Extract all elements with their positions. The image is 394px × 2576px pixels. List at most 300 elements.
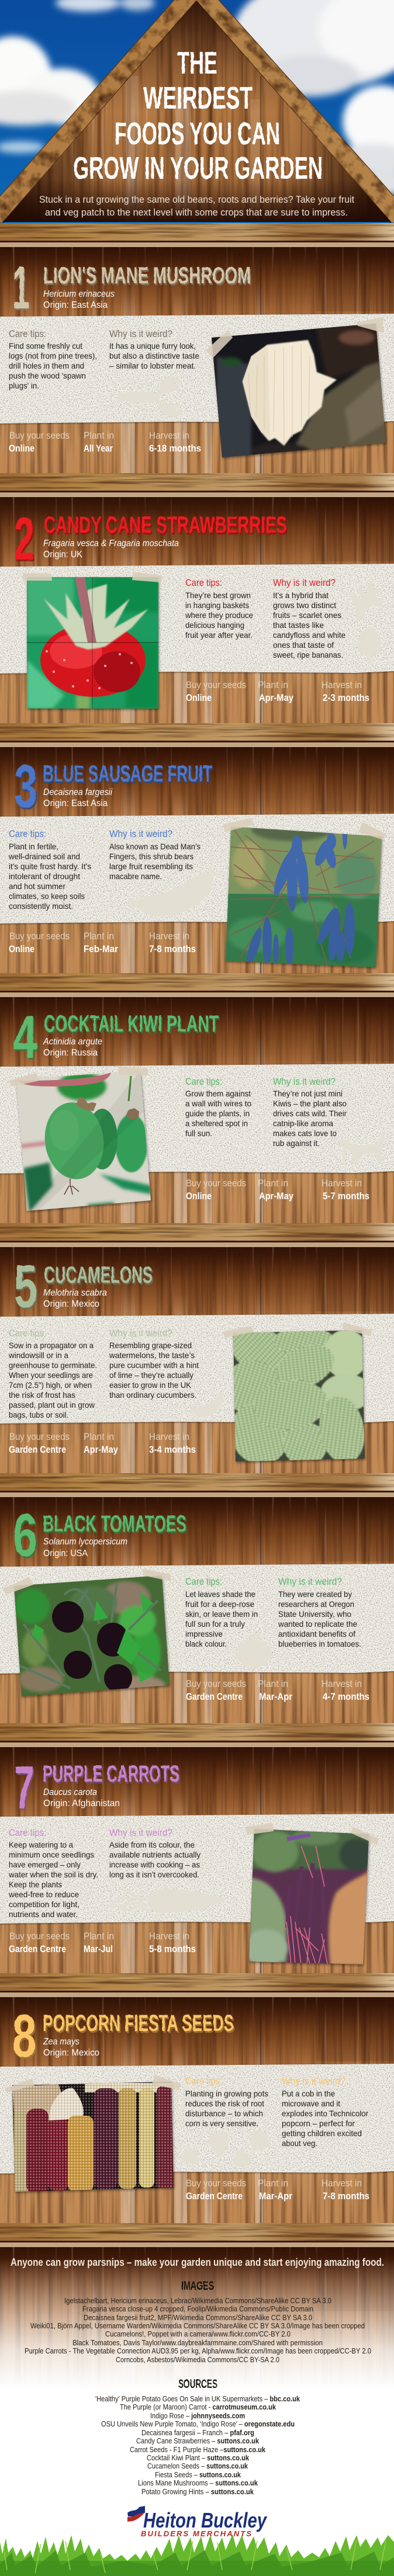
care tips: Care tips: [185,577,222,588]
logo: Heiton Buckley Builders Merchants [127,2506,268,2538]
sky with clouds [0,0,394,225]
why weird [278,1576,361,1648]
source list: Decaisnea fargesii – Franch – pfaf.org [141,2429,254,2437]
seeds planting harvest facts [186,1679,369,1702]
why weird: increase with cooking – as [109,1860,200,1869]
title: THE [177,46,217,81]
seeds planting harvest facts: All Year [84,443,113,454]
seeds planting harvest facts: Online [9,944,34,954]
seeds planting harvest facts: Mar-Jul [84,1944,113,1954]
seeds planting harvest facts: Plant in [258,1178,288,1189]
species and origin: Origin: East Asia [43,799,108,808]
care tips: a sheltered spot in [185,1119,248,1128]
why weird: wanted to replicate the [278,1619,357,1629]
care tips: competition for light, [9,1900,80,1909]
panel: footer [0,2223,394,2576]
why weird [109,828,201,881]
seeds planting harvest facts: Buy your seeds [9,431,70,441]
species and origin: Origin: Mexico [43,1299,99,1309]
care tips: reduces the risk of root [185,2099,264,2108]
care tips: Care tips: [9,828,46,839]
sources heading: SOURCES [178,2377,217,2391]
care tips: 7cm (2.5") high, or when [9,1380,92,1390]
seeds planting harvest facts: Buy your seeds [186,1178,246,1189]
care tips [8,1328,97,1419]
care tips: skin, or leave them in [185,1609,258,1619]
heading number and title: 3 [14,753,37,821]
heading number and title: 5 [14,1253,37,1321]
seeds planting harvest facts: Harvest in [322,680,362,690]
why weird: easier to grow in the UK [109,1380,192,1390]
why weird: makes cats love to [273,1129,337,1138]
photo: purple carrots [244,1825,374,1969]
why weird: Also known as Dead Man’s [109,842,201,851]
why weird [282,2075,368,2148]
panel: 2 candy cane strawberries [0,473,394,723]
roof beam [0,1723,394,1749]
heading number and title [14,1754,179,1822]
panel: 5 cucamelons [0,1223,394,1476]
why weird: than ordinary cucumbers. [109,1390,196,1400]
why weird: catnip-like aroma [273,1119,333,1128]
source list: Lions Mane Mushrooms – suttons.co.uk [138,2479,258,2487]
heading number and title: 8 [12,2002,36,2070]
source list: Candy Cane Strawberries – suttons.co.uk [136,2437,259,2445]
why weird: pure cucumber with a hint [109,1360,199,1370]
source list: Indigo Rose – johnnyseeds.com [150,2412,245,2420]
title [73,46,323,186]
why weird: popcorn – perfect for [282,2119,355,2128]
why weird: Why is it weird? [109,328,172,339]
image credits: Cucamelons!, Poppet with a camera/www.flickr.com/CC-BY 2.0 [105,2330,291,2338]
tape [223,818,386,840]
seeds planting harvest facts: 2-3 months [323,693,369,703]
care tips: delicious hanging [185,620,244,630]
roof beam [0,2223,394,2249]
seeds planting harvest facts: Buy your seeds [186,2178,246,2189]
wood planks [0,747,394,973]
care tips: Keep watering to a [9,1840,73,1849]
care tips: it's quite frost hardy. It's [9,862,91,871]
care tips: Sow in a propagator on a [9,1341,94,1350]
species and origin: Origin: East Asia [43,300,108,310]
heading number and title [14,753,212,821]
icon: banana watermark [347,578,383,620]
tape [223,1323,372,1338]
species and origin: Origin: Mexico [43,2048,99,2058]
seeds planting harvest facts: Online [9,443,34,454]
icon: sausage watermark [130,867,219,916]
paper strip [0,564,394,673]
heading number and title: BLACK TOMATOES [43,1511,186,1537]
paper strip [0,314,394,423]
species and origin [43,539,179,560]
seeds planting harvest facts: Garden Centre [9,1445,66,1455]
species and origin [43,289,115,310]
why weird: Fingers, this shrub bears [109,852,193,861]
seeds planting harvest facts: Harvest in [322,2178,362,2189]
why weird: It’s a hybrid that [273,591,329,600]
care tips: the risk of frost has [9,1390,75,1400]
icon: popcorn watermark [182,2130,269,2167]
source list: Carrot Seeds - F1 Purple Haze –suttons.co.uk [130,2446,265,2454]
care tips: nutrients and water. [9,1910,78,1919]
why weird: blueberries in tomatoes. [278,1639,361,1648]
care tips: a wall with wires to [185,1099,251,1108]
heading number and title: CANDY CANE STRAWBERRIES [44,512,287,538]
seeds planting harvest facts [9,931,196,954]
seeds planting harvest facts: Harvest in [322,1679,362,1689]
source list: OSU Unveils New Purple Tomato, ‘Indigo Rose’ – oregonstate.edu [101,2420,295,2428]
care tips: consistently moist. [9,901,73,911]
panel: 7 purple carrots [0,1723,394,1973]
photo: corn cobs [9,2079,175,2193]
seeds planting harvest facts: Apr-May [259,1191,294,1202]
seeds planting harvest facts: 5-7 months [323,1191,369,1202]
species and origin [43,1787,120,1808]
care tips [185,2075,268,2128]
roof wood gable [0,0,394,225]
tape [5,2075,181,2092]
care tips: weed-free to reduce [8,1890,79,1899]
why weird: getting children excited [282,2129,362,2138]
care tips: greenhouse to germinate. [9,1360,97,1370]
why weird: microwave and it [282,2099,340,2108]
image credits: Black Tomatoes, Davis Taylor/www.daybreakfarmmaine.com/Shared with permission [72,2339,323,2347]
heading number and title [13,1004,219,1071]
photo: cucamelons [232,1329,367,1464]
care tips: passed, plant out in grow [9,1400,95,1409]
image credits: Igelstachelbart, Hericium erinaceus, Lebrac/Wikimedia Commons/ShareAlike CC BY SA 3.0 [64,2297,331,2305]
seeds planting harvest facts: Online [186,1191,212,1202]
logo: Heiton Buckley Builders Merchants: BUILDERS MERCHANTS [141,2529,251,2538]
care tips: and hot summer [9,881,65,891]
why weird: of lime – they’re actually [109,1370,193,1380]
care tips: bags, tubs or soil. [9,1410,68,1419]
roof beam [0,973,394,999]
roof beam [0,1223,394,1249]
panel: 1 lion's mane mushroom [0,223,394,473]
seeds planting harvest facts: 4-7 months [323,1692,369,1702]
heading number and title: BLUE SAUSAGE FRUIT [43,761,212,787]
image credits [25,2297,371,2364]
tape [3,1569,171,1595]
seeds planting harvest facts: Buy your seeds [9,1931,70,1942]
species and origin [43,1288,107,1309]
seeds planting harvest facts: Plant in [84,431,114,441]
care tips [9,328,97,390]
source list: Potato Growing Hints – suttons.co.uk [141,2488,254,2496]
care tips: minimum once seedlings [9,1850,94,1859]
species and origin: Fragaria vesca & Fragaria moschata [43,539,179,548]
roof beam [0,1473,394,1499]
why weird: macabre name. [109,872,162,881]
wood planks [0,1997,394,2223]
seeds planting harvest facts: Buy your seeds [186,680,246,690]
paper strip [0,1064,394,1174]
species and origin [43,1037,102,1058]
roof frame [0,0,394,223]
heading number and title: 6 [13,1502,37,1570]
care tips: Care tips: [9,328,46,339]
heading number and title: 1 [12,254,30,322]
seeds planting harvest facts: Buy your seeds [9,1432,70,1442]
photo: lion's mane mushroom [208,318,389,461]
intro text: and veg patch to the next level with some crops that are sure to impress. [45,207,348,218]
tape [245,1823,379,1845]
source list: Cucamelon Seeds – suttons.co.uk [147,2462,248,2470]
source list: Cocktail Kiwi Plant – suttons.co.uk [147,2454,249,2462]
why weird: Why is it weird? [109,828,172,839]
why weird [109,1827,201,1879]
why weird: Why is it weird? [273,577,336,588]
seeds planting harvest facts: Mar-Apr [259,1692,293,1702]
care tips: Care tips: [185,1076,222,1087]
icon: candyfloss watermark [357,626,381,664]
seeds planting harvest facts: Feb-Mar [84,944,119,954]
care tips [8,1827,98,1919]
care tips: Find some freshly cut [9,341,82,350]
tape [206,317,383,358]
why weird: candyfloss and white [273,630,345,640]
roof beam [0,473,394,499]
title: FOODS YOU CAN [115,116,280,151]
why weird: sweet, ripe bananas. [273,650,343,659]
care tips [185,1076,251,1138]
why weird: ones that taste of [273,640,334,650]
tape [23,572,162,582]
why weird: available nutrients actually [109,1850,201,1859]
seeds planting harvest facts: Online [186,693,212,703]
paper strip [0,1814,394,1924]
heading number and title: 2 [14,505,34,573]
photo: kiwi fruit [12,1066,155,1215]
care tips: fruit year after year. [185,630,253,640]
why weird: – similar to lobster meat. [109,361,196,370]
why weird: State University, who [278,1609,351,1619]
heading number and title: CUCAMELONS [44,1262,153,1288]
panel: 6 black tomatoes [0,1473,394,1723]
why weird: They’re not just mini [273,1089,343,1098]
image credits: Corncobs, Asbestos/Wikimedia Commons/CC BY-SA 2.0 [116,2356,279,2364]
seeds planting harvest facts: Harvest in [149,931,189,942]
image credits: Fragaria vesca close-up 4 cropped, Foolip/Wikimedia Commons/Public Domain [82,2305,313,2313]
care tips: Care tips: [185,2075,222,2087]
care tips: have emerged – only [9,1860,81,1869]
care tips: Plant in fertile, [9,842,58,851]
heading number and title [12,2002,234,2070]
images heading: IMAGES [181,2279,214,2293]
source list: 'Healthy' Purple Potato Goes On Sale in UK Supermarkets – bbc.co.uk [95,2395,300,2403]
care tips: plugs' in. [9,381,39,390]
seeds planting harvest facts: Garden Centre [9,1944,66,1954]
heading number and title: POPCORN FIESTA SEEDS [43,2011,234,2036]
care tips [185,577,253,640]
care tips: Let leaves shade the [185,1589,255,1599]
species and origin: Zea mays [43,2037,80,2047]
care tips: Grow them against [185,1089,251,1098]
paper strip [0,1314,394,1424]
why weird [109,1328,199,1400]
seeds planting harvest facts: Plant in [84,1432,114,1442]
care tips: water when the soil is dry. [8,1870,98,1879]
species and origin [43,787,112,808]
seeds planting harvest facts: Mar-Apr [259,2191,293,2202]
care tips: well-drained soil and [8,852,80,861]
seeds planting harvest facts: 5-8 months [149,1944,196,1954]
care tips: full sun for a truly [185,1619,245,1629]
care tips: logs (not from pine trees), [9,351,97,360]
icon: grass [0,2534,394,2576]
wood planks [0,1747,394,1973]
species and origin: Solanum lycopersicum [43,1537,127,1547]
species and origin [43,1537,127,1558]
why weird: rub against it. [273,1138,320,1148]
logo: Heiton Buckley Builders Merchants: Heiton Buckley [143,2508,268,2532]
source list [95,2395,300,2496]
intro text: Stuck in a rut growing the same old beans, roots and berries? Take your fruit [39,194,354,205]
photo: black tomatoes [12,1571,172,1700]
care tips [185,1576,258,1648]
why weird [109,328,199,370]
species and origin: Origin: USA [43,1549,88,1558]
care tips: When your seedlings are [9,1370,93,1380]
why weird: grows two distinct [273,600,336,610]
icon: carrot watermark [111,1888,227,1913]
panel: header sky and roof [0,0,394,225]
wood planks [0,247,394,473]
heading number and title: LION'S MANE MUSHROOM [43,263,251,289]
why weird: antioxidant benefits of [278,1629,355,1638]
seeds planting harvest facts: Garden Centre [186,1692,243,1702]
why weird: long as it isn’t overcooked. [109,1870,199,1879]
why weird: Why is it weird? [109,1328,172,1339]
care tips: Care tips: [9,1328,46,1339]
wood planks [0,1497,394,1723]
seeds planting harvest facts [186,680,369,703]
seeds planting harvest facts: Buy your seeds [186,1679,246,1689]
seeds planting harvest facts [186,2178,369,2202]
seeds planting harvest facts [186,1178,369,1202]
seeds planting harvest facts: Harvest in [149,1432,189,1442]
intro text [39,194,354,218]
photo: blue sausage fruit [222,818,386,970]
why weird: Kiwis – the plant also [273,1099,347,1108]
photo: strawberry [27,577,158,710]
seeds planting harvest facts: Plant in [84,931,114,942]
title: WEIRDEST [143,81,253,116]
care tips: push the wood 'spawn [9,371,86,380]
species and origin: Decaisnea fargesii [43,787,112,797]
wood planks fading to white [0,2247,394,2576]
heading number and title: 7 [14,1754,34,1822]
seeds planting harvest facts: Plant in [258,1679,288,1689]
why weird: Why is it weird? [109,1827,172,1838]
why weird: that tastes like [273,620,324,630]
care tips: disturbance – to which [185,2109,263,2118]
wood planks [0,497,394,723]
why weird: researchers at Oregon [278,1599,354,1609]
seeds planting harvest facts: 7-8 months [149,944,196,954]
care tips: where they produce [185,610,253,620]
why weird: large fruit resembling its [109,862,193,871]
care tips: black colour. [185,1639,227,1648]
wood planks [0,1247,394,1473]
care tips: Care tips: [9,1827,46,1838]
seeds planting harvest facts: Garden Centre [186,2191,243,2202]
heading number and title: PURPLE CARROTS [43,1761,179,1787]
why weird: drives cats wild. Their [273,1109,347,1118]
species and origin: Origin: Russia [43,1048,98,1058]
source list: Fiesta Seeds – suttons.co.uk [155,2471,241,2479]
care tips [8,828,91,911]
why weird: watermelons, the taste’s [109,1351,195,1360]
species and origin: Actinidia argute [43,1037,102,1047]
care tips: fruit for a deep-rose [185,1599,254,1609]
species and origin: Origin: Afghanistan [43,1799,120,1808]
paper strip [0,1564,394,1674]
panel: 8 popcorn fiesta seeds [0,1973,394,2223]
care tips: Keep the plants [9,1880,62,1889]
why weird [273,577,345,659]
seeds planting harvest facts: Harvest in [322,1178,362,1189]
heading number and title [14,505,287,573]
image credits: Decaisnea fargesii fruit2, MPF/Wikimedia Commons/ShareAlike CC BY SA 3.0 [84,2314,312,2322]
care tips: in hanging baskets [185,600,249,610]
care tips: windowsill or in a [8,1351,68,1360]
care tips: They’re best grown [185,591,251,600]
why weird: Resembling grape-sized [109,1341,192,1350]
care tips: Planting in growing pots [185,2089,268,2098]
paper strip [0,814,394,924]
roof beam [0,723,394,749]
roof beam [0,223,394,249]
seeds planting harvest facts: Buy your seeds [9,931,70,942]
why weird: They were created by [278,1589,352,1599]
seeds planting harvest facts [9,431,201,454]
seeds planting harvest facts: Plant in [258,680,288,690]
seeds planting harvest facts: Plant in [84,1931,114,1942]
care tips: full sun. [185,1129,212,1138]
icon: cat watermark [339,1130,386,1164]
seeds planting harvest facts: Harvest in [149,1931,189,1942]
care tips: drill holes in them and [9,361,84,370]
wood planks [0,997,394,1223]
why weird: Put a cob in the [282,2089,335,2098]
species and origin: Daucus carota [43,1787,97,1797]
why weird: but also a distinctive taste [109,351,199,360]
care tips: impressive [185,1629,223,1638]
icon: tomato watermark [236,1633,272,1668]
seeds planting harvest facts [9,1931,196,1954]
why weird: explodes into Technicolor [282,2109,368,2118]
heading number and title: 4 [13,1004,37,1071]
paper strip [0,2064,394,2174]
why weird: Why is it weird? [282,2075,345,2087]
seeds planting harvest facts: 7-8 months [323,2191,369,2202]
species and origin: Origin: UK [43,550,82,560]
tape [9,1067,148,1086]
care tips: guide the plants, in [185,1109,250,1118]
heading number and title [12,254,251,322]
care tips: climates, so keep soils [9,891,85,901]
care tips: corn is very sensitive. [185,2119,258,2128]
icon: lime wedge watermark [190,1389,224,1417]
why weird: Why is it weird? [278,1576,342,1587]
why weird: fruits – scarlet ones [273,610,341,620]
heading number and title [13,1502,186,1570]
source list: The Purple (or Maroon) Carrot - carrotmuseum.co.uk [120,2403,276,2411]
